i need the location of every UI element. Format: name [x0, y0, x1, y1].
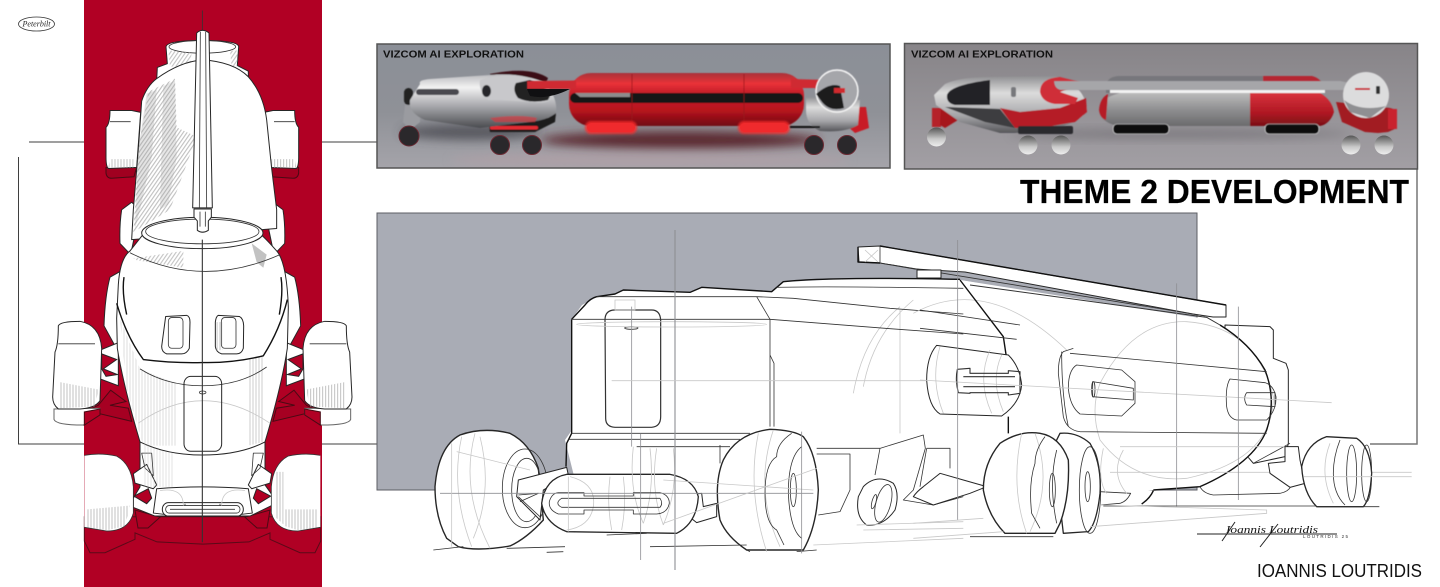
door	[605, 310, 661, 427]
underbody	[920, 448, 950, 487]
vehicle: rear module	[932, 76, 1087, 134]
windows	[162, 315, 244, 354]
vehicle: front module	[1336, 72, 1397, 133]
author name: IOANNIS LOUTRIDIS	[1257, 561, 1422, 581]
signature: Ioannis Loutridis	[1225, 524, 1318, 536]
side wheels and bulges	[53, 110, 141, 425]
signature: LOUTRIDIS 25	[1303, 534, 1348, 539]
body silhouette fill	[565, 278, 1275, 520]
logo: Peterbilt oval	[18, 17, 54, 31]
front wheels	[84, 454, 320, 531]
ground strokes	[433, 533, 817, 552]
logo: Peterbilt oval: Peterbilt	[22, 20, 51, 28]
vehicle: front module	[790, 70, 869, 133]
right porthole	[1226, 379, 1276, 420]
left front wheel	[435, 430, 543, 549]
rear module outline	[1225, 325, 1288, 463]
middle wheel 2	[1053, 433, 1100, 533]
porthole 1	[927, 345, 1022, 416]
trailer tank	[132, 60, 277, 240]
centre line	[201, 240, 203, 542]
front bumper module	[133, 440, 272, 528]
cab outline	[566, 319, 572, 467]
panel: grey backdrop	[377, 213, 1197, 490]
trailer lines	[913, 240, 1412, 538]
bumper capsule	[542, 474, 698, 533]
vehicle: trailer	[1099, 76, 1334, 134]
vehicle: red trailer	[569, 73, 804, 126]
vehicle: boom	[1054, 81, 1370, 90]
connector lines	[18, 142, 1417, 444]
ground strokes	[970, 506, 1379, 537]
perspective sketch of vehicle	[433, 230, 1412, 570]
trailer body fill over rear	[960, 280, 1272, 490]
small wheel	[858, 479, 897, 525]
signature	[1197, 522, 1348, 547]
rear wheels	[1302, 437, 1372, 507]
top view sketch of vehicle	[53, 10, 352, 553]
cab lines	[433, 230, 987, 570]
rear door	[184, 376, 222, 451]
vehicle: wheels	[399, 126, 856, 154]
arm	[683, 493, 717, 523]
under trailer	[1100, 443, 1291, 505]
right front wheel	[717, 429, 818, 550]
boom	[193, 30, 212, 232]
image panel: Vizcom exploration 2	[904, 44, 1418, 169]
title: THEME 2 DEVELOPMENT	[1020, 173, 1409, 210]
rear module	[157, 40, 248, 81]
image panel: Vizcom exploration 1	[377, 44, 890, 168]
mirrored side wheels	[264, 110, 352, 425]
trailer panel	[1058, 348, 1267, 433]
bottom shadow outline	[84, 517, 321, 553]
boom in perspective	[858, 246, 1226, 317]
cab body	[117, 217, 288, 455]
inner porthole	[1068, 365, 1135, 416]
label: VIZCOM AI EXPLORATION	[911, 48, 1053, 60]
vehicle: boom	[526, 78, 819, 90]
middle wheel 1	[983, 433, 1069, 533]
rear arm	[1268, 447, 1305, 487]
label: VIZCOM AI EXPLORATION	[383, 48, 524, 60]
vehicle: wheels	[927, 128, 1394, 154]
panel: red backdrop	[84, 0, 322, 587]
vehicle: rear module	[403, 71, 556, 132]
centre line top	[201, 10, 203, 37]
vehicle: glow pads	[585, 121, 790, 134]
construction lines	[674, 230, 676, 570]
